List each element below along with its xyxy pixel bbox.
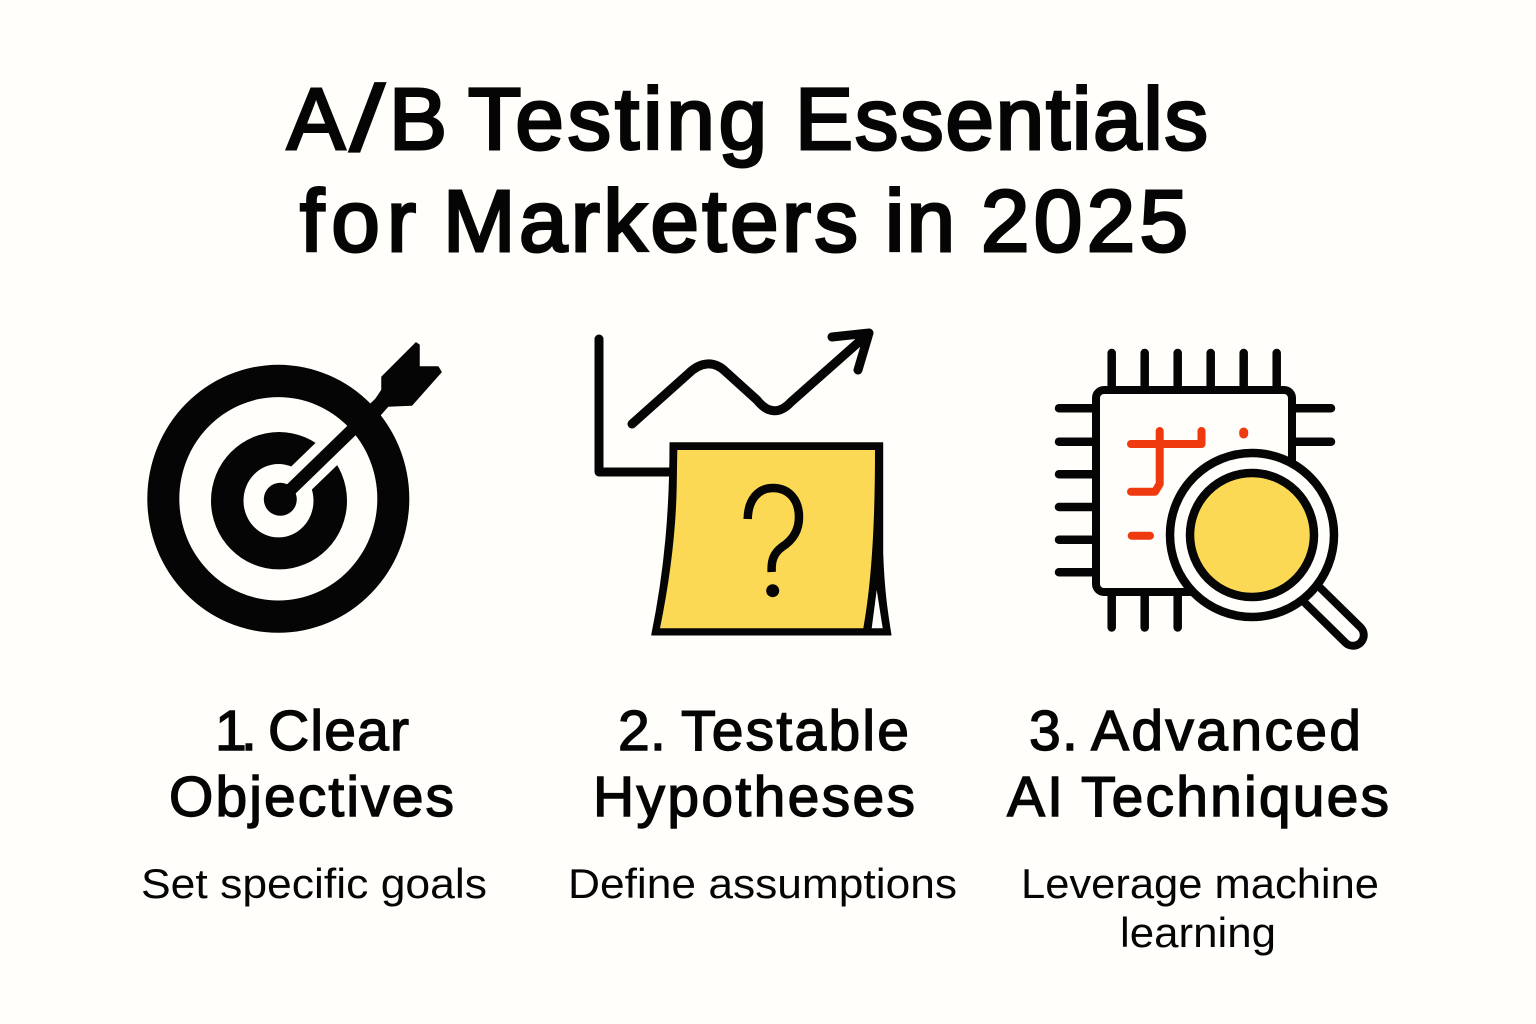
icon: chart with sticky note	[599, 333, 891, 635]
heading: advanced AI techniques: Advanced	[1091, 699, 1361, 763]
heading: clear objectives: Objectives	[169, 765, 454, 829]
chart axis	[599, 339, 676, 472]
heading: testable hypotheses: Testable	[681, 699, 909, 763]
title: /	[349, 67, 386, 172]
title: 2025	[981, 173, 1188, 270]
title: for	[300, 173, 416, 270]
heading: advanced AI techniques: 3.	[1029, 699, 1078, 763]
magnifier lens	[1170, 453, 1334, 617]
heading: clear objectives: 1.	[215, 699, 257, 763]
chip body	[1096, 390, 1292, 592]
red circuit marks	[1131, 431, 1202, 536]
text: leverage machine learning: Leverage machine	[1021, 860, 1379, 907]
title: Testing	[468, 71, 767, 168]
icon: target with arrow	[147, 343, 441, 633]
sticky note face	[660, 450, 875, 628]
sticky note outline	[652, 443, 891, 635]
heading: testable hypotheses: 2.	[618, 699, 666, 763]
heading: testable hypotheses	[593, 699, 915, 829]
trend line arrow	[632, 333, 869, 424]
heading: clear objectives: Clear	[268, 699, 409, 763]
title: Marketers	[443, 173, 858, 270]
heading: clear objectives	[169, 699, 454, 829]
title	[287, 67, 1208, 270]
magnifier handle	[1300, 583, 1353, 635]
text: set specific goals: Set specific goals	[141, 860, 487, 907]
title: Essentials	[795, 71, 1208, 168]
note fold	[872, 590, 883, 628]
text: define assumptions: Define assumptions	[568, 860, 957, 907]
heading: advanced AI techniques: AI	[1007, 765, 1063, 829]
icon: AI chip with magnifier	[1059, 353, 1353, 635]
chip pins	[1059, 353, 1331, 628]
heading: advanced AI techniques	[1007, 699, 1389, 829]
heading: advanced AI techniques: Techniques	[1081, 765, 1389, 829]
question mark	[748, 488, 799, 572]
heading: testable hypotheses: Hypotheses	[593, 765, 915, 829]
text: leverage machine learning	[1021, 860, 1379, 956]
text: leverage machine learning: learning	[1120, 909, 1276, 956]
title: AB	[287, 71, 447, 168]
title: in	[885, 173, 955, 270]
